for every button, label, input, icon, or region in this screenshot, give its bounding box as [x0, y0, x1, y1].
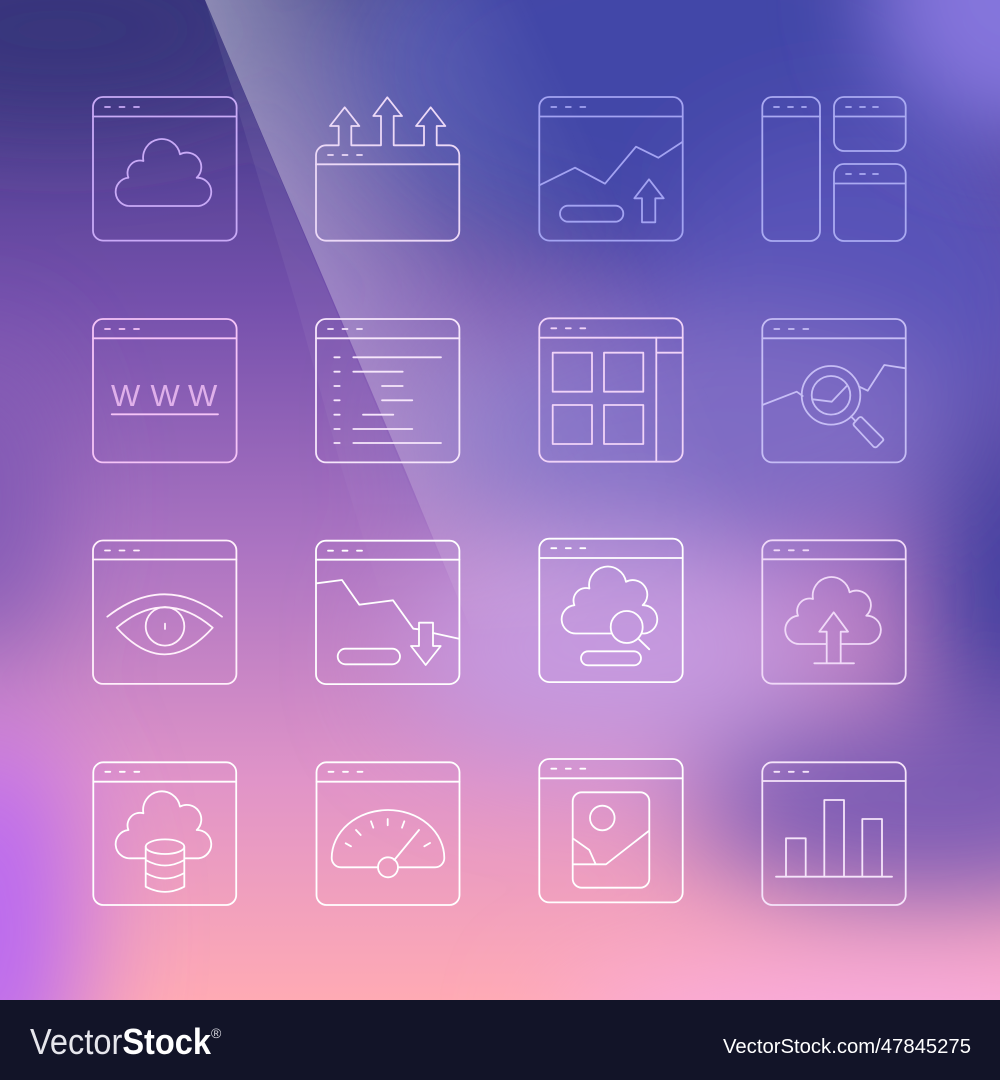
icon: bar chart window: [762, 762, 906, 905]
light beam: [205, 0, 605, 590]
window frame: [93, 97, 237, 241]
icon: window with falling chart: [316, 541, 459, 684]
code lines: [334, 357, 441, 443]
icon: eye window: [93, 540, 236, 684]
footer bar: [0, 1000, 1000, 1080]
icon: cloud database window: [93, 762, 236, 905]
image id: VectorStock.com/47845275: [723, 1036, 971, 1058]
www text: WWW: [111, 378, 218, 413]
icon: code window: [316, 319, 459, 462]
icon: cloud window: [93, 97, 237, 241]
logo: VectorStock: [30, 1021, 212, 1062]
icon: gauge window: [316, 762, 460, 905]
icon: cloud search window: [539, 539, 683, 682]
registered mark: ®: [211, 1025, 222, 1041]
cloud: [116, 139, 211, 206]
icon: thumbnails window: [539, 318, 683, 462]
icon: www window: [93, 319, 237, 462]
icon: cloud upload window: [762, 540, 906, 684]
icon: window with rising chart: [539, 97, 683, 241]
icon: three window layout: [762, 97, 906, 241]
icon: chart under magnifier: [762, 319, 906, 462]
icon: image window: [539, 759, 683, 902]
icon: window with three up arrows: [316, 97, 459, 241]
